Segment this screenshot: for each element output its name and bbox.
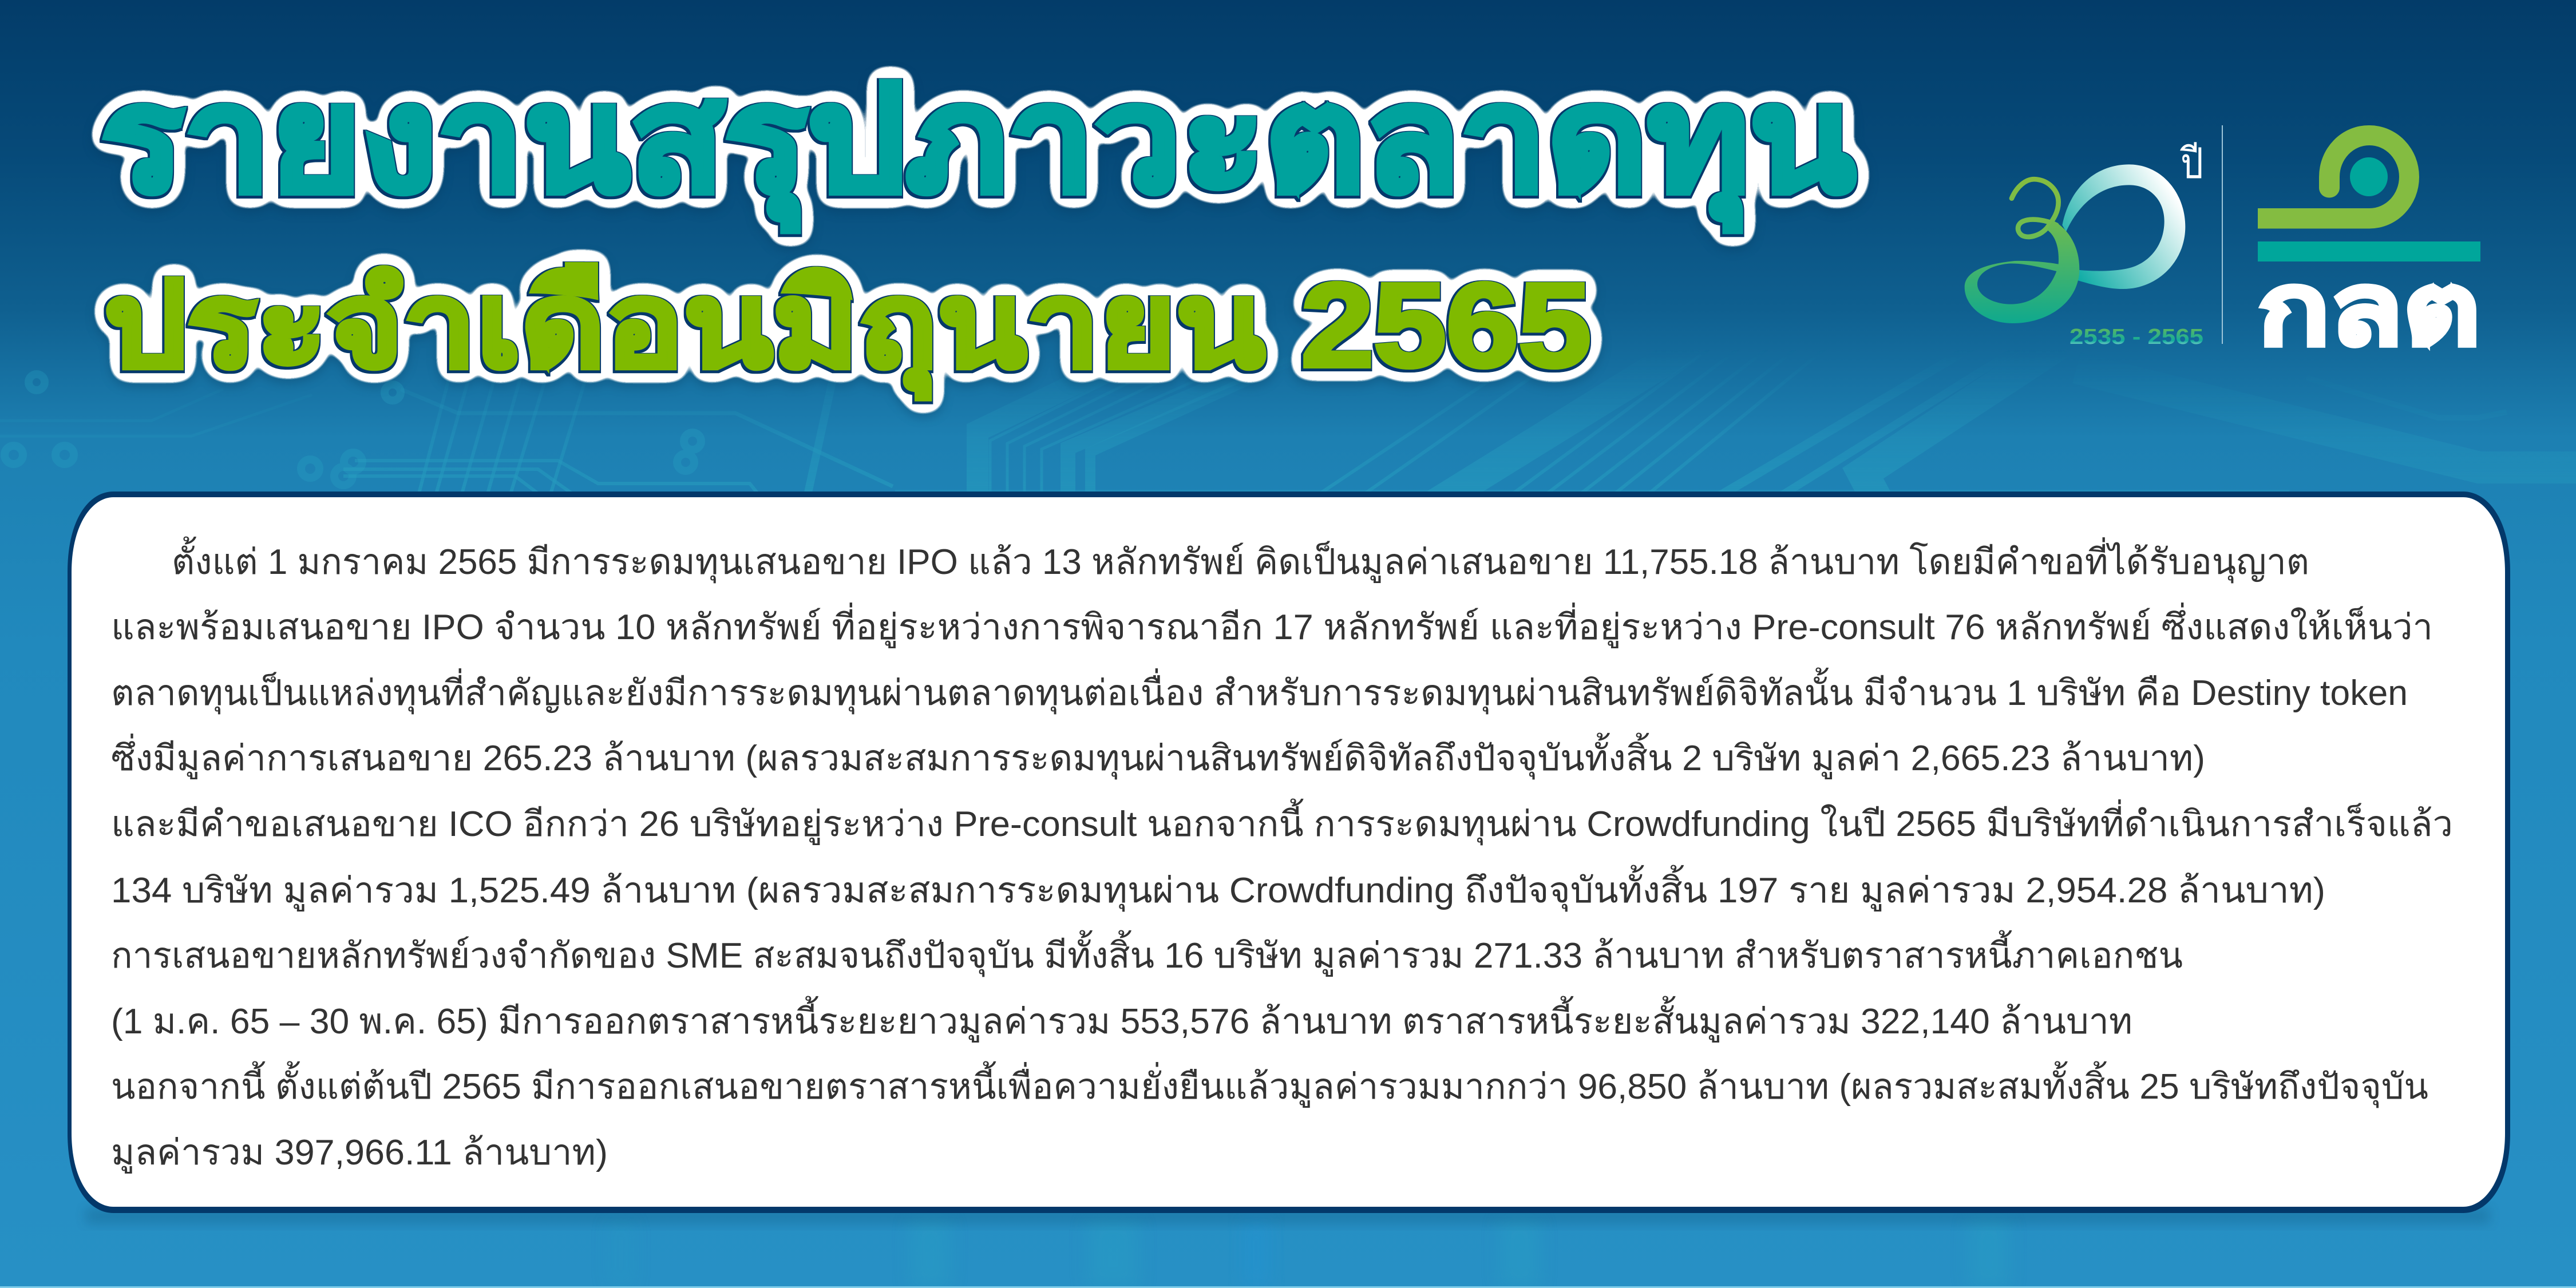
text block: paragraph lines: และมีคำขอเสนอขาย ICO อีกกว่า 26 บริษัทอยู่ระหว่าง Pre-consult นอกจากนี้ การระดมทุนผ่าน Crowdfunding ในปี 2565 มีบริษัทที่ดำเนินการสำเร็จแล้ว — [111, 798, 2453, 845]
logo: SEC Thailand — [2258, 125, 2480, 366]
text block: paragraph lines: ตลาดทุนเป็นแหล่งทุนที่สำคัญและยังมีการระดมทุนผ่านตลาดทุนต่อเนื่อง สำหรับการระดมทุนผ่านสินทรัพย์ดิจิทัลนั้น มีจำนวน 1 บริษัท คือ Destiny token — [111, 667, 2408, 714]
panel: summary text — [68, 492, 2510, 1223]
text block: paragraph lines: การเสนอขายหลักทรัพย์วงจำกัดของ SME สะสมจนถึงปัจจุบัน มีทั้งสิ้น 16 บริษัท มูลค่ารวม 271.33 ล้านบาท สำหรับตราสารหนี้ภาคเอกชน — [111, 930, 2183, 977]
title: line 2: ประจำเดือนมิถุนายน 2565 — [104, 259, 1591, 399]
text block: paragraph lines: ซึ่งมีมูลค่าการเสนอขาย 265.23 ล้านบาท (ผลรวมสะสมการระดมทุนผ่านสินทรัพย์ดิจิทัลถึงปัจจุบันทั้งสิ้น 2 บริษัท มูลค่า 2,665.23 ล้านบาท) — [111, 732, 2205, 779]
text block: paragraph lines — [111, 536, 2453, 1174]
text block: paragraph lines: ตั้งแต่ 1 มกราคม 2565 มีการระดมทุนเสนอขาย IPO แล้ว 13 หลักทรัพย์ คิดเป็นมูลค่าเสนอขาย 11,755.18 ล้านบาท โดยมีคำขอที่ได้รับอนุญาต — [172, 536, 2309, 583]
label: year word: ปี — [2180, 140, 2203, 187]
divider between logos — [2222, 125, 2223, 344]
text block: paragraph lines: (1 ม.ค. 65 – 30 พ.ค. 65) มีการออกตราสารหนี้ระยะยาวมูลค่ารวม 553,576 ล้านบาท ตราสารหนี้ระยะสั้นมูลค่ารวม 322,140 ล้านบาท — [111, 996, 2132, 1043]
text block: paragraph lines: มูลค่ารวม 397,966.11 ล้านบาท) — [111, 1133, 608, 1174]
title: line 1: รายงานสรุปภาวะตลาดทุน — [101, 57, 1856, 232]
icon: green swirl with teal dot — [2258, 125, 2480, 261]
text block: paragraph lines: 134 บริษัท มูลค่ารวม 1,525.49 ล้านบาท (ผลรวมสะสมการระดมทุนผ่าน Crowdfunding ถึงปัจจุบันทั้งสิ้น 197 ราย มูลค่ารวม 2,954.28 ล้านบาท) — [111, 865, 2325, 911]
text block: paragraph lines: นอกจากนี้ ตั้งแต่ต้นปี 2565 มีการออกเสนอขายตราสารหนี้เพื่อความยั่งยืนแล้วมูลค่ารวมมากกว่า 96,850 ล้านบาท (ผลรวมสะสมทั้งสิ้น 25 บริษัทถึงปัจจุบัน — [111, 1061, 2428, 1108]
label: anniversary years: 2535 - 2565 — [2069, 325, 2203, 349]
text block: paragraph lines: และพร้อมเสนอขาย IPO จำนวน 10 หลักทรัพย์ ที่อยู่ระหว่างการพิจารณาอีก 17 หลักทรัพย์ และที่อยู่ระหว่าง Pre-consult 76 หลักทรัพย์ ซึ่งแสดงให้เห็นว่า — [111, 603, 2433, 648]
wordmark: กลต — [2258, 253, 2480, 366]
icon: number 30 swirl — [1965, 164, 2185, 323]
logo: 30th anniversary mark — [1965, 140, 2203, 349]
